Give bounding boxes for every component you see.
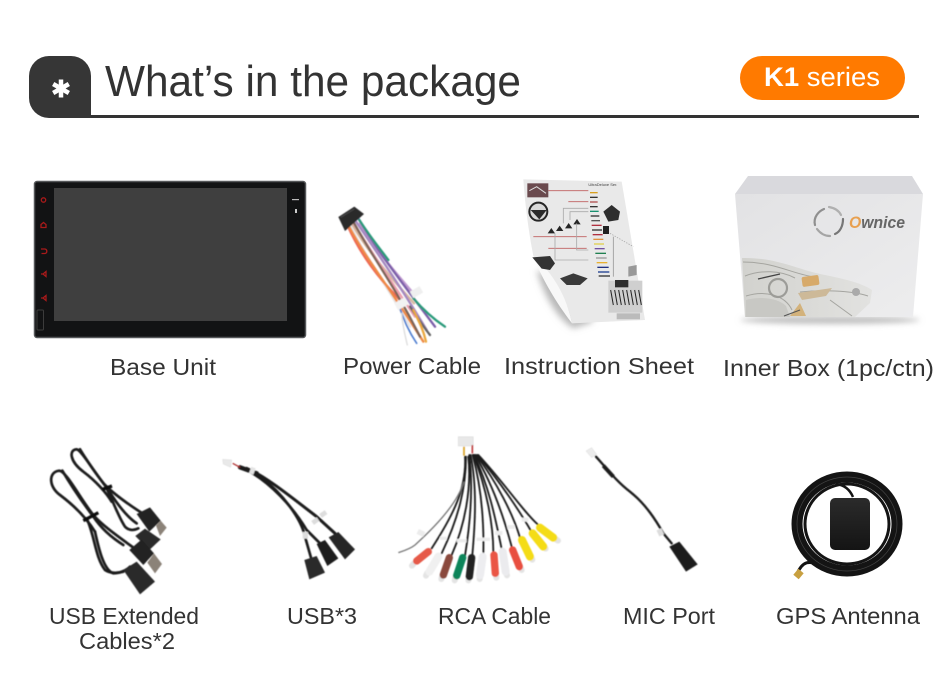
label: base unit: Base Unit [110,354,216,380]
USB cables image [51,449,167,594]
item: instruction sheet [504,179,695,379]
title: What’s in the package [105,58,521,106]
item: power cable [338,207,481,379]
instruction sheet image: UltraDeluxe Ser. [588,182,617,187]
MIC port image [586,448,698,572]
label: USB extended cables: USB Extended [49,603,199,629]
icon: Ownice logo: Ownice [849,214,905,232]
instruction sheet image [523,179,645,328]
GPS antenna image [796,477,897,577]
header [29,56,919,118]
item: USB*3 [223,459,357,629]
item: GPS antenna [776,477,921,629]
RCA cable image [398,437,558,580]
inner box image [735,176,923,324]
icon: Ownice logo [815,207,905,236]
base unit image [34,182,306,338]
label: power cable: Power Cable [343,353,481,379]
item: USB extended cables [49,449,206,654]
USB*3 image [223,459,355,579]
item: MIC port [586,448,715,629]
icon: asterisk badge [29,56,91,118]
item: RCA cable [398,437,558,629]
item: base unit [34,182,306,380]
label: instruction sheet: Instruction Sheet [504,353,695,379]
label: USB*3: USB*3 [287,603,357,629]
car interior illustration [742,258,872,317]
label: inner box: Inner Box (1pc/ctn) [723,355,934,381]
label: USB extended cables: Cables*2 [79,628,175,654]
series badge [740,56,905,100]
label: GPS antenna: GPS Antenna [776,603,921,629]
label: MIC port: MIC Port [623,603,715,629]
header rule [91,115,919,118]
series badge: K1 series [764,62,880,92]
label: RCA cable: RCA Cable [438,603,551,629]
item: inner box [723,176,934,381]
power cable image [338,207,445,345]
